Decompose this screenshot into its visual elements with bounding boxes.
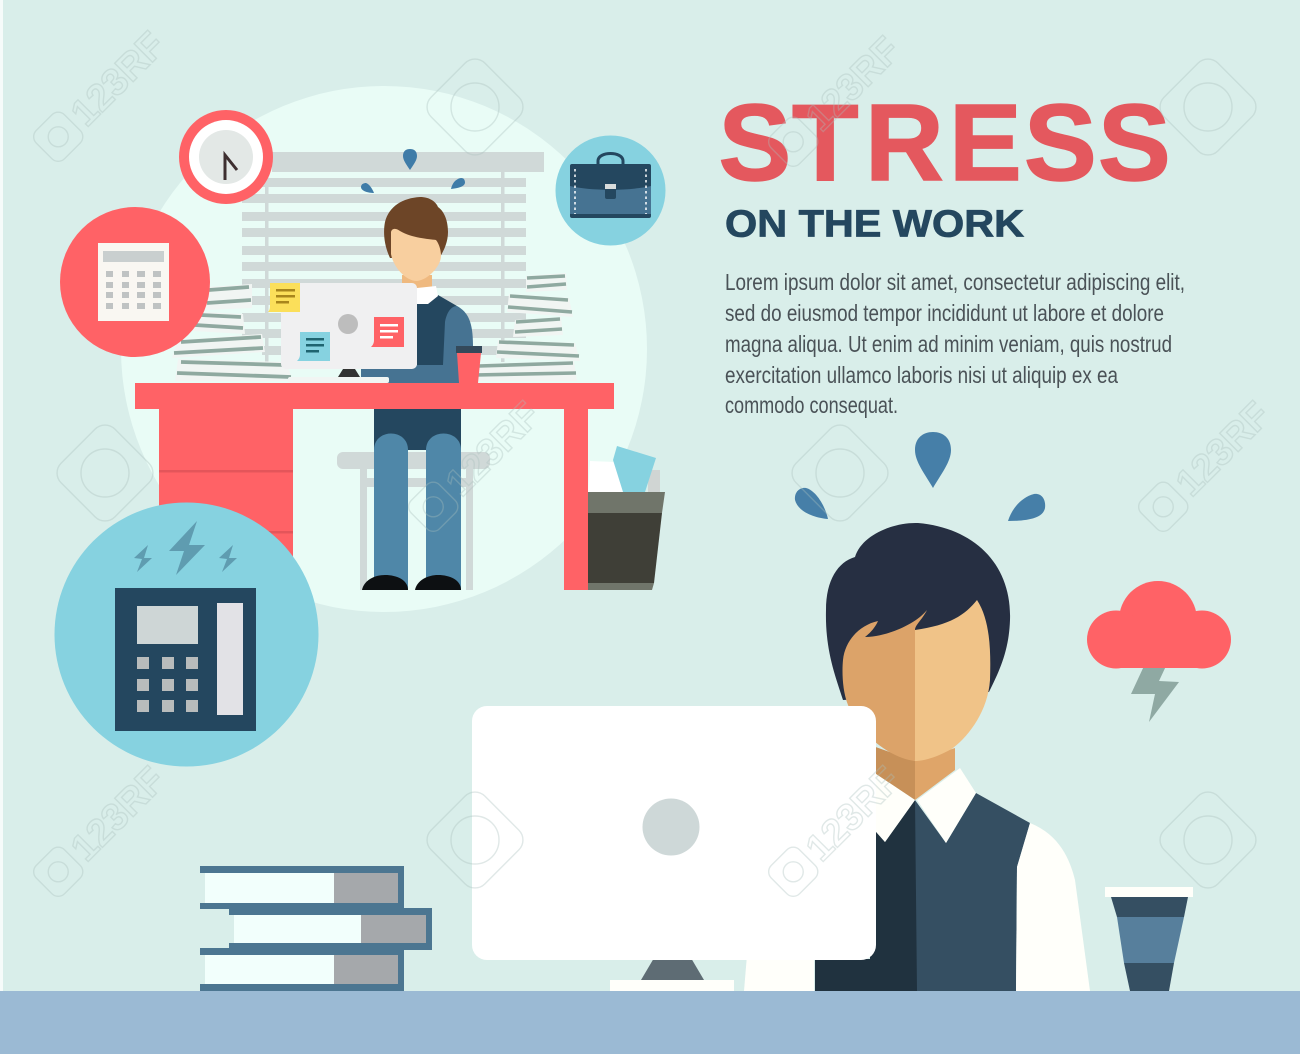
arm [361, 306, 473, 383]
computer monitor [472, 706, 876, 991]
laptop [281, 283, 417, 383]
wall clock [179, 110, 273, 204]
vest [815, 793, 1030, 991]
phone body [115, 588, 256, 731]
face [391, 229, 441, 281]
watermarks: 123RF [63, 759, 174, 870]
torso [417, 295, 470, 383]
icon: calendar [60, 207, 210, 357]
neck [870, 745, 955, 800]
face shadow side [843, 610, 927, 761]
paper stack: right [473, 273, 580, 381]
book top [200, 866, 404, 909]
title: STRESS [718, 82, 1171, 204]
window blinds [242, 152, 544, 362]
hair [826, 523, 1010, 700]
body text: exercitation ullamco laboris nisi ut aliquip ex ea [725, 362, 1118, 388]
body text: commodo consequat. [725, 392, 898, 418]
cloud with lightning [1087, 581, 1231, 722]
watermarks: 123RF [63, 24, 174, 135]
icon: ringing telephone [54, 502, 318, 766]
icon: briefcase [556, 136, 666, 246]
body text: Lorem ipsum dolor sit amet, consectetur adipiscing elit, [725, 269, 1185, 295]
shoes [362, 575, 461, 590]
watermarks: 123RF [438, 394, 549, 505]
sticky note: yellow [268, 283, 300, 312]
big background circle [121, 86, 647, 612]
legs [374, 405, 461, 590]
large sweat drops [795, 432, 1045, 521]
watermarks: 123RF [1168, 394, 1279, 505]
body text [725, 269, 1185, 418]
lightning bolts [134, 521, 237, 575]
desk worker [361, 197, 473, 590]
paper stack: left [172, 284, 293, 381]
main man [744, 523, 1090, 991]
small sweat drops [361, 149, 465, 193]
shirt sleeves [744, 823, 1090, 991]
subtitle: ON THE WORK [725, 204, 1025, 246]
collar [417, 286, 438, 304]
watermarks: 123RF [798, 759, 909, 870]
face light side [915, 600, 990, 761]
body text: magna aliqua. Ut enim ad minim veniam, quis nostrud [725, 331, 1172, 357]
red coffee cup [456, 346, 482, 383]
neck [402, 275, 432, 292]
waste bin [588, 446, 665, 590]
chair [337, 452, 490, 590]
red desk [135, 383, 614, 590]
paper coffee cup [1105, 887, 1193, 991]
stack of books [200, 866, 432, 991]
shirt collar [870, 768, 976, 843]
table surface [0, 991, 1300, 1054]
book middle [229, 908, 432, 950]
keypad [137, 657, 198, 712]
book bottom [200, 948, 404, 991]
watermarks: 123RF [798, 29, 909, 140]
body text: sed do eiusmod tempor incididunt ut labore et dolore [725, 300, 1164, 326]
hair [384, 197, 448, 258]
sticky note: blue [297, 332, 330, 361]
sticky note: red [371, 317, 404, 347]
